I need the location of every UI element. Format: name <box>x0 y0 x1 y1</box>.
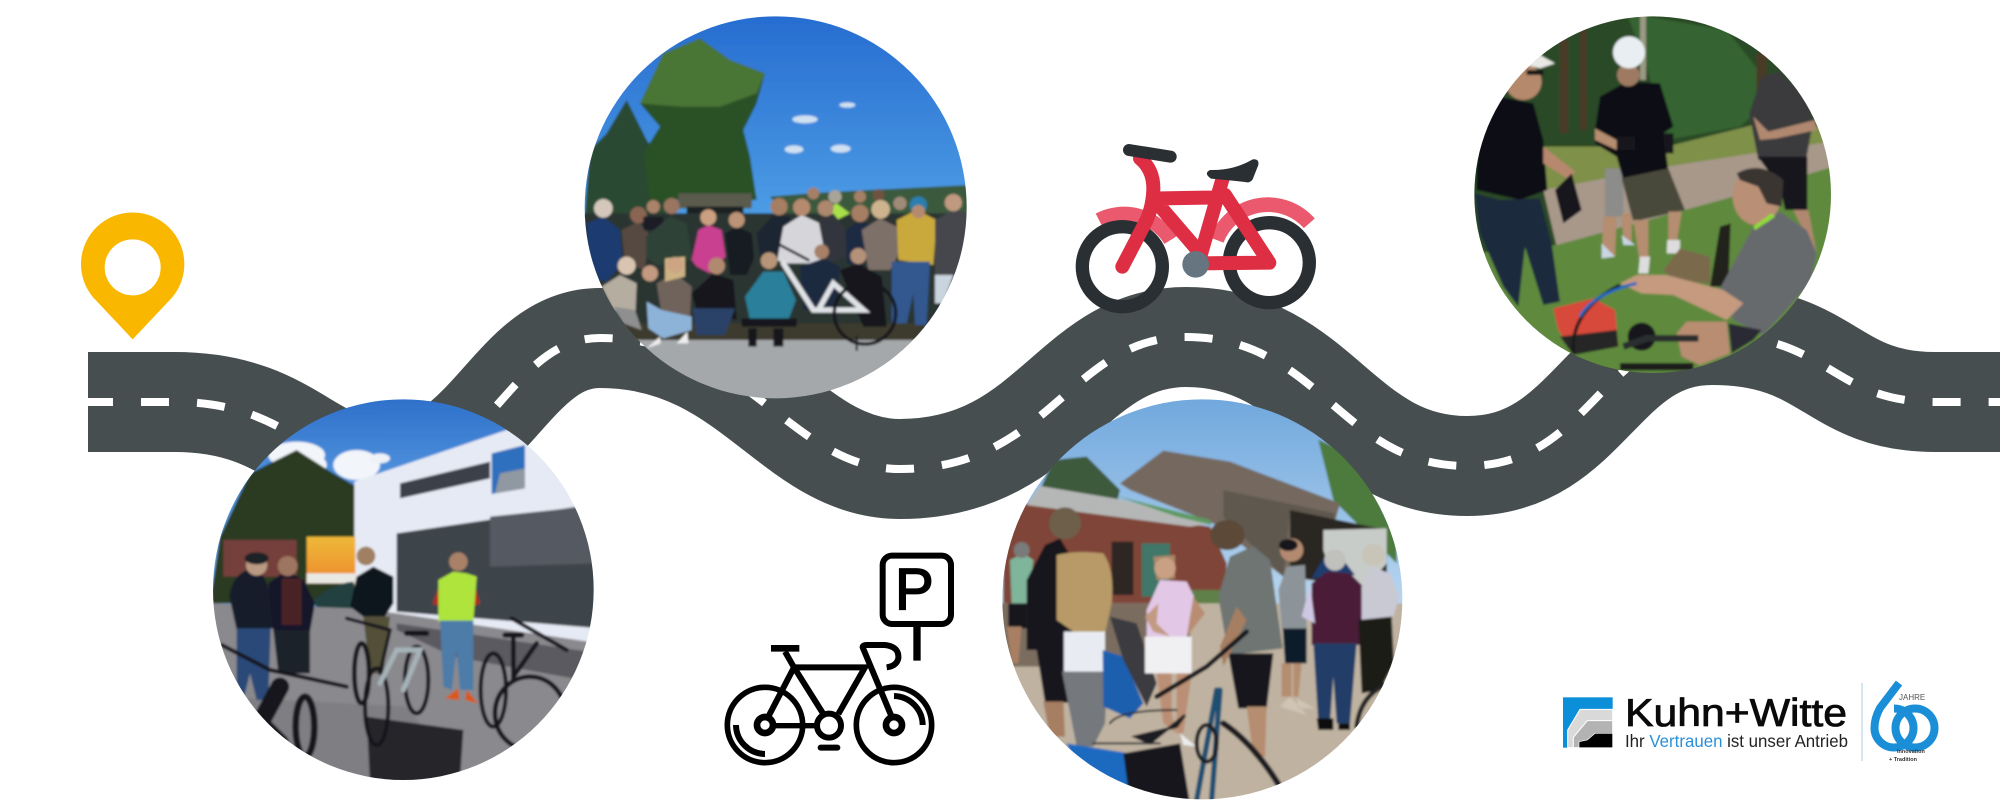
bike wheel rim and crank <box>1573 283 1698 367</box>
anniversary mark: 60 Jahre: Innovation <box>1897 749 1925 755</box>
parked e-bikes <box>222 618 567 757</box>
logo mark <box>1563 697 1613 748</box>
standing man left <box>1475 55 1582 307</box>
company name: Kuhn+Witte <box>1625 692 1847 735</box>
people in the yard <box>1007 507 1399 757</box>
icon: bicycle with parking sign <box>727 556 951 763</box>
photo: tyre repair workshop in the forest <box>1474 16 1831 373</box>
standing man centre with helmet <box>1595 36 1685 273</box>
logo: Kuhn+Witte <box>1563 683 1934 763</box>
parking sign: P <box>895 558 934 622</box>
people at the shop <box>229 547 480 703</box>
standing man right <box>1749 72 1817 253</box>
icon: red bicycle on the road <box>1082 150 1309 307</box>
bicycle in foreground <box>1067 632 1385 800</box>
icon: yellow location pin <box>81 212 184 339</box>
kneeling man with tyre <box>1553 168 1817 365</box>
people front row <box>602 244 887 348</box>
anniversary mark: 60 Jahre <box>1862 683 1934 763</box>
photo: large group with e-bike in front of forest <box>584 16 967 398</box>
parking sign <box>883 556 951 661</box>
bicycle outline <box>727 645 932 763</box>
white e-bike <box>780 245 896 350</box>
road <box>88 335 2000 470</box>
photo: group at the Kuhn+Witte shop <box>200 390 600 790</box>
people back row <box>587 187 970 325</box>
anniversary mark: 60 Jahre: + Tradition <box>1889 757 1918 763</box>
slogan: Ihr Vertrauen ist unser Antrieb <box>1625 731 1848 751</box>
anniversary mark: 60 Jahre: JAHRE <box>1899 693 1925 702</box>
photo: gathering in a farmyard <box>990 390 1410 800</box>
